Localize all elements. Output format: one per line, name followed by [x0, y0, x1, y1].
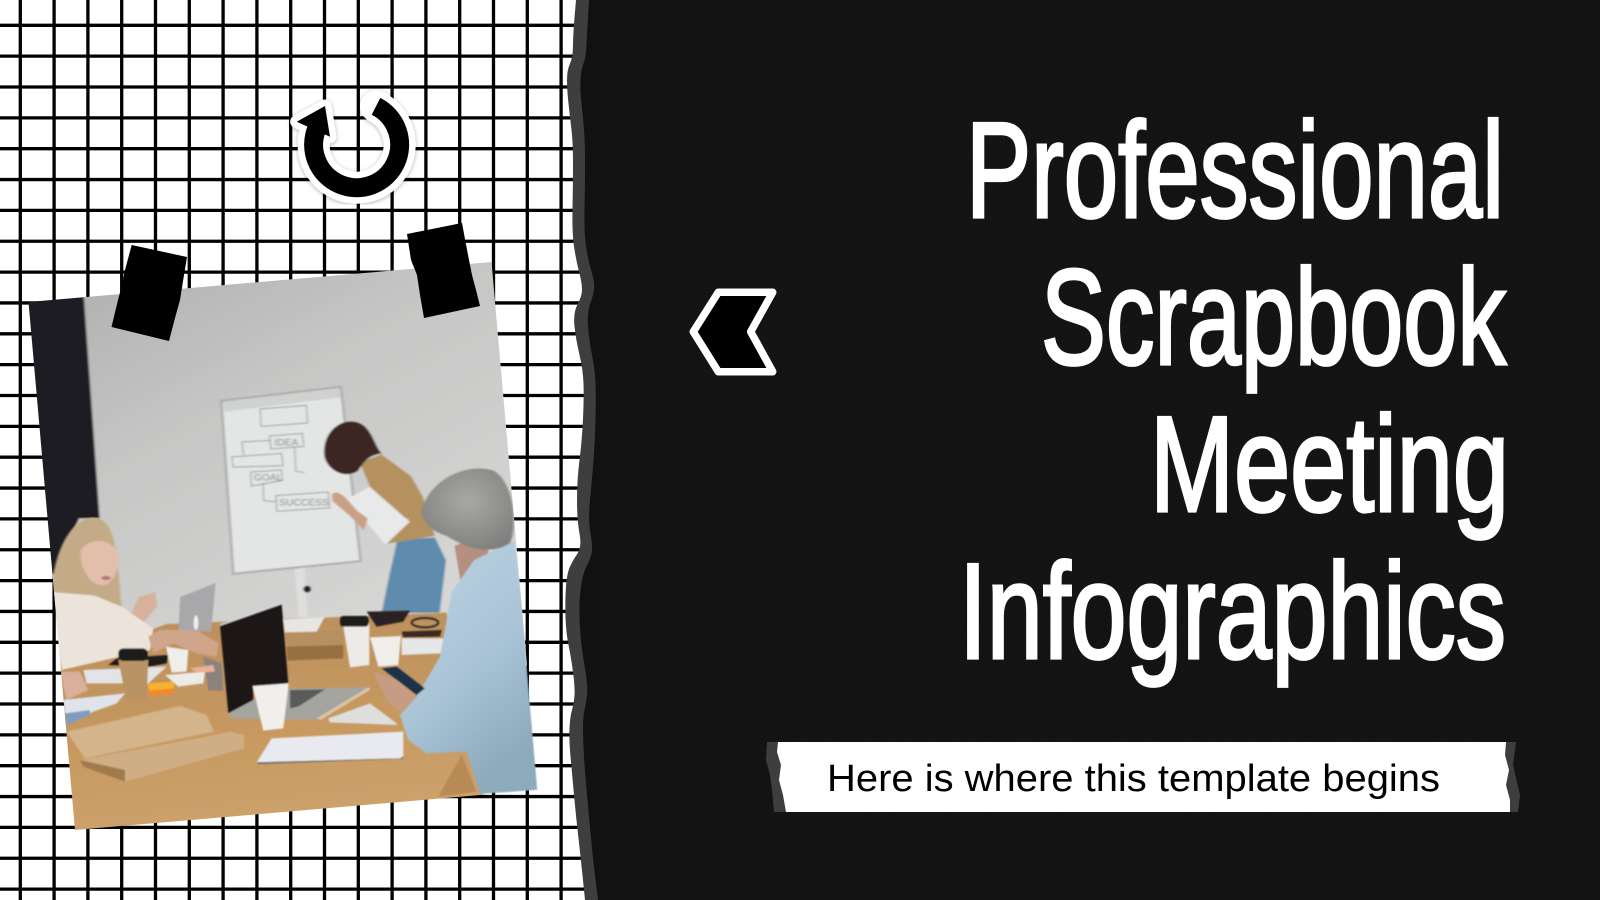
tape: right	[407, 223, 480, 318]
front laptop	[220, 603, 371, 731]
wall	[52, 262, 528, 666]
tape: left	[112, 245, 187, 341]
whiteboard stand	[295, 567, 311, 618]
back laptop	[178, 583, 216, 632]
whiteboard	[221, 387, 361, 574]
blond woman	[51, 518, 157, 624]
cardboard boxes	[67, 706, 244, 782]
subtitle banner	[766, 742, 1520, 812]
clipboard notebooks	[257, 703, 403, 764]
older colleague head	[421, 468, 514, 550]
panel: meeting photo	[28, 262, 538, 830]
panel: dark textured background	[579, 0, 1600, 900]
door	[24, 296, 100, 574]
title	[959, 94, 1509, 687]
wooden stand, paper and tablet	[283, 611, 443, 661]
papers and sticky notes	[63, 655, 223, 725]
subtitle text: Here is where this template begins	[827, 758, 1440, 800]
white tape strip	[777, 742, 1510, 812]
panel: torn grey paper edge	[565, 0, 640, 900]
whiteboard: GOAL	[254, 473, 283, 483]
table	[60, 613, 483, 840]
panel: grid paper background	[0, 0, 620, 900]
icon: left chevron arrow	[693, 292, 773, 372]
woman at the board	[324, 421, 446, 613]
whiteboard: IDEA	[274, 438, 299, 448]
cups	[118, 616, 401, 702]
icon: rotate arrow sticker	[297, 106, 400, 188]
blouse and arm	[53, 592, 218, 700]
whiteboard: SUCCESS	[279, 498, 329, 509]
torn tape backing	[766, 742, 1520, 812]
older colleague body	[373, 532, 537, 797]
